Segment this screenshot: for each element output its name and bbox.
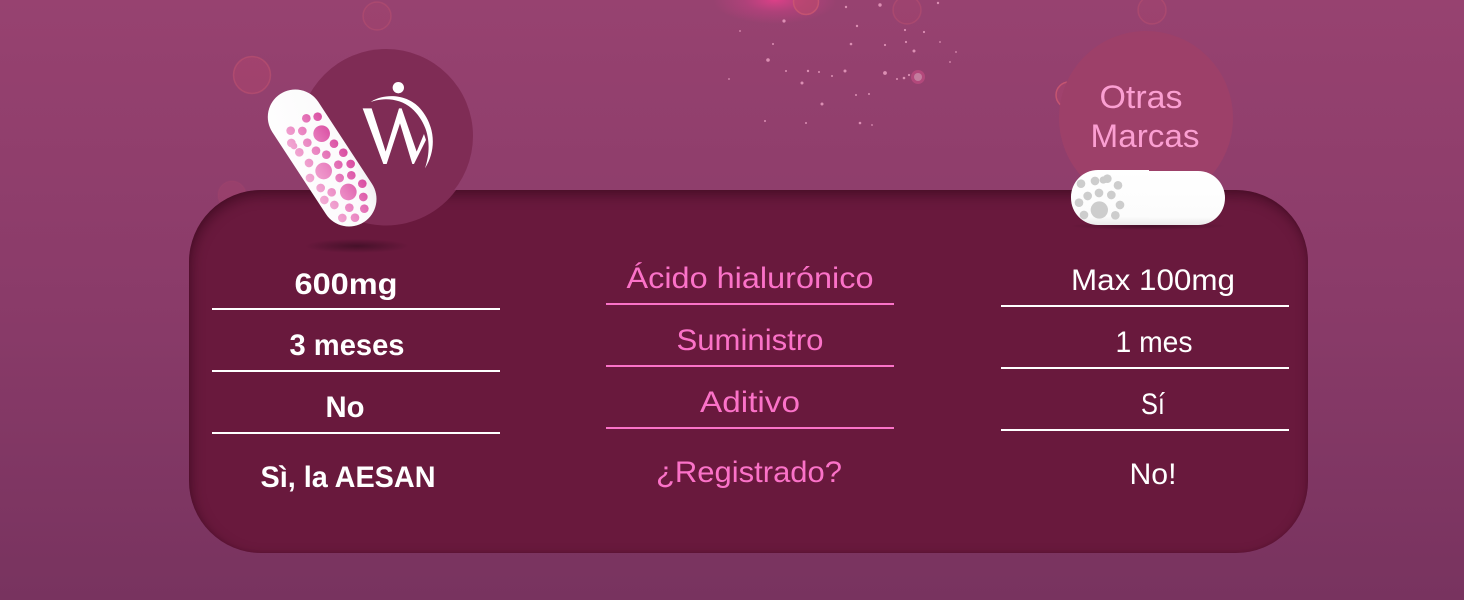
heading: otras marcas: Marcas: [1090, 118, 1200, 154]
heading: otras marcas: Otras: [1100, 79, 1182, 115]
column: brand values: 600mg: [294, 268, 398, 301]
icon: other brands capsule: [1071, 170, 1225, 225]
column: other brands values: Sí: [1141, 388, 1166, 421]
capsule dots: [286, 112, 369, 222]
icon: brand logo: [363, 82, 433, 168]
badge lower part: [316, 190, 456, 225]
column: brand values: No: [326, 391, 364, 424]
capsule dots: [1075, 174, 1124, 220]
column: other brands values: Max 100mg: [1071, 264, 1235, 297]
shadow under pill: [305, 239, 409, 253]
column: criteria: [606, 262, 894, 489]
shadow under grey capsule: [1070, 222, 1226, 230]
column: other brands values: No!: [1130, 458, 1176, 491]
column: other brands values: 1 mes: [1116, 326, 1192, 359]
column: brand values: 3 meses: [290, 329, 404, 362]
column: criteria: ¿Registrado?: [656, 456, 842, 489]
column: brand values: [212, 268, 500, 494]
circle: brand logo badge: [299, 49, 473, 223]
column: criteria: Suministro: [676, 324, 824, 357]
heading: otras marcas: [1090, 79, 1200, 154]
comparison panel: [189, 190, 1308, 553]
column: other brands values: [1001, 264, 1289, 491]
column: criteria: Aditivo: [700, 386, 800, 419]
icon: brand capsule: [286, 112, 369, 222]
particle cluster: [728, 2, 957, 126]
column: brand values: Sì, la AESAN: [260, 461, 436, 494]
column: criteria: Ácido hialurónico: [626, 262, 874, 295]
decorative bubbles: [218, 0, 1166, 209]
circle: otras marcas badge: [1059, 31, 1233, 205]
